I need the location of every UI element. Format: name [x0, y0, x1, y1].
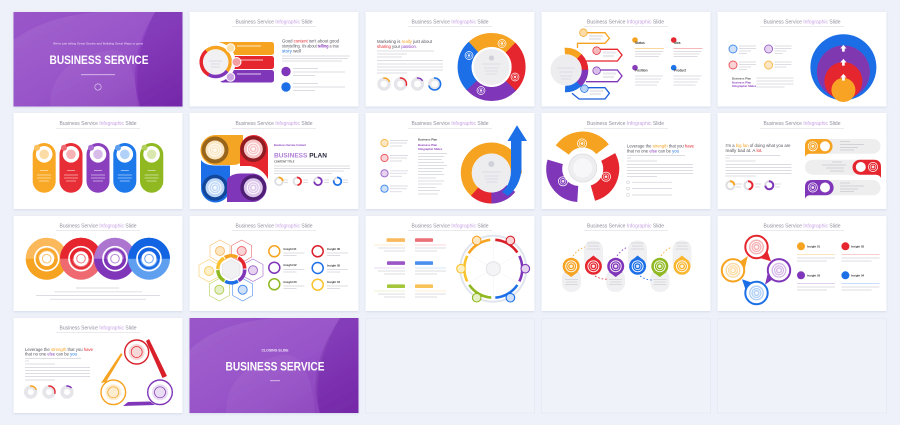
- slide title: Business Service Infographic Slide: [60, 224, 136, 230]
- left items: [381, 139, 388, 192]
- pin: red: [585, 256, 602, 275]
- orange strap: [101, 353, 122, 383]
- blue petal: [201, 160, 230, 202]
- grey capsules: [562, 240, 692, 292]
- arc: [539, 43, 593, 97]
- orange pin: [722, 256, 748, 281]
- orange petal: [201, 135, 243, 165]
- pin: yellow: [674, 256, 690, 275]
- node icons: [457, 236, 530, 302]
- plan text: [274, 143, 327, 164]
- plan text: CONTENT TITLE: [274, 160, 295, 164]
- purple circle: [94, 238, 136, 280]
- heading text: I'm a big fan of doing what you are: [726, 143, 791, 148]
- orange stripe: [218, 42, 274, 55]
- middle text: Business Plan: [418, 143, 437, 147]
- slide title: Business Service Infographic Slide: [412, 224, 488, 230]
- red pill: [60, 143, 82, 193]
- slide title: Business Service Infographic Slide: [587, 224, 664, 230]
- check list: [627, 181, 629, 196]
- slide title: Business Service Infographic Slide: [587, 121, 664, 127]
- slide 2: stacked stripes: [190, 12, 358, 106]
- cover tagline: We're just telling Great Stories and Building Great Ways to grow: [53, 42, 144, 46]
- item headers: Insight 01: [807, 244, 820, 248]
- item: Idea: [671, 37, 681, 45]
- blue pin: [742, 279, 768, 304]
- red strap: [146, 339, 167, 378]
- slide 11: four overlapping circles: [14, 216, 182, 311]
- plan text: BUSINESS PLAN: [274, 153, 327, 160]
- slide 16: triangle belts: [14, 318, 182, 413]
- slide 17: purple closing: [190, 317, 358, 413]
- middle text: Business Plan: [418, 138, 437, 142]
- slide 12: hexagon network: [190, 216, 358, 311]
- slide title: Business Service Infographic Slide: [764, 20, 840, 26]
- heading text: [627, 144, 694, 154]
- ring icons: [465, 40, 519, 94]
- item: Product: [671, 65, 687, 72]
- purple bullet: [281, 67, 291, 76]
- heading text: storytelling. It's about telling a true: [282, 44, 339, 48]
- slide 4: branching arms: [539, 12, 710, 106]
- nested circles: [810, 34, 876, 102]
- red tab: [805, 160, 881, 178]
- closing line: [270, 380, 280, 382]
- purple pin: [765, 259, 790, 285]
- purple petal: [227, 174, 267, 202]
- grey outer ring: [460, 236, 526, 302]
- heading text: [25, 347, 93, 357]
- left item circles: [729, 45, 773, 69]
- pin: green: [651, 258, 668, 277]
- orange wheel: [101, 380, 126, 405]
- bottom note: Business Plan: [732, 76, 751, 80]
- slide title: Business Service Infographic Slide: [412, 121, 488, 127]
- purple strap: [123, 402, 155, 406]
- pin: purple: [607, 258, 624, 277]
- heading text: sharing your passion.: [377, 44, 417, 49]
- insight list: Insight 06: [327, 247, 340, 251]
- blue pill: [113, 143, 136, 193]
- slide 7: four-part business plan: [190, 113, 358, 209]
- item: Idea: Idea: [674, 41, 681, 45]
- item: Position: [632, 65, 648, 72]
- item: Position: Position: [635, 68, 648, 72]
- item: Status: [632, 37, 645, 45]
- item: Product: Product: [674, 68, 687, 72]
- insight list: Insight 01: [284, 247, 297, 251]
- heading text: [377, 39, 433, 49]
- stripe icons: [226, 44, 241, 81]
- purple wheel: [148, 380, 172, 405]
- empty placeholder slides: [366, 318, 886, 413]
- slide title: Business Service Infographic Slide: [764, 224, 840, 230]
- colored arcs: [453, 228, 534, 309]
- heading text: Good content isn't about good: [282, 38, 339, 44]
- slide 5: nested circles: [718, 12, 886, 106]
- heading text: Marketing is really just about: [377, 39, 433, 44]
- closing label: CLOSING SLIDE: [262, 348, 288, 352]
- item headers: Insight 03: [807, 273, 820, 277]
- red arm: [586, 49, 622, 61]
- pin: orange: [563, 258, 580, 277]
- slide title: Business Service Infographic Slide: [764, 121, 840, 127]
- tags: [386, 238, 433, 288]
- slide title: Business Service Infographic Slide: [60, 326, 136, 332]
- red circle: [60, 238, 102, 280]
- slide 1: purple cover: [14, 11, 182, 106]
- item: Status: Status: [635, 41, 645, 45]
- blue arm: [572, 88, 609, 99]
- red wheel: [125, 340, 149, 364]
- central circle: [550, 54, 582, 86]
- heading text: really bad at. A lot.: [726, 148, 762, 153]
- slide 15: four pins loop: [718, 216, 886, 311]
- purple sector: [552, 142, 606, 196]
- item headers: [797, 242, 864, 279]
- white hub: [463, 239, 523, 299]
- slide title: Business Service Infographic Slide: [236, 224, 312, 230]
- small donuts: [377, 77, 441, 91]
- blue circle: [128, 238, 170, 280]
- slide title: Business Service Infographic Slide: [587, 20, 664, 26]
- slide title: Business Service Infographic Slide: [236, 20, 312, 26]
- up arrows: [840, 45, 847, 81]
- center disc: [569, 154, 597, 182]
- heading text: [726, 143, 791, 153]
- red petal: [240, 135, 268, 179]
- center color ring: [213, 251, 250, 288]
- mini donuts: [275, 177, 341, 185]
- orange circle: [26, 238, 68, 280]
- slide 10: speech tabs: [718, 113, 886, 209]
- cover title: BUSINESS SERVICE: [50, 53, 148, 67]
- heading text: Leverage the strength that you have: [627, 144, 694, 148]
- ring with center: [195, 42, 236, 82]
- slide 6: five pills: [14, 113, 182, 209]
- middle text: Infographic Slides: [418, 147, 443, 151]
- orange arm: [578, 33, 609, 48]
- slide 3: cycle ring: [366, 12, 534, 106]
- outer hexagons: [199, 240, 263, 301]
- slide title: Business Service Infographic Slide: [412, 20, 488, 26]
- slide 8: ring with rising arrow: [366, 113, 534, 209]
- heading text: Leverage the strength that you have: [25, 347, 93, 352]
- purple tab: [805, 180, 880, 199]
- purple pill: [86, 143, 110, 193]
- insight list: Insight 04: [327, 280, 340, 284]
- ring: [456, 138, 527, 208]
- heading text: that no one else can be you: [25, 352, 77, 357]
- slide 13: six part ring: [366, 216, 534, 311]
- dashed connectors: [573, 247, 672, 280]
- bottom note: [732, 76, 757, 88]
- heading text: story well: [282, 48, 301, 54]
- green pill: [140, 143, 163, 193]
- slide 14: six pins timeline: [542, 216, 710, 311]
- middle text: [418, 138, 443, 151]
- plan text: Business Service Content: [274, 143, 306, 147]
- insight list: [269, 246, 340, 290]
- purple stripe: [220, 70, 274, 82]
- hex icons: [204, 246, 258, 294]
- arm icons: [580, 29, 600, 92]
- insight list: Insight 02: [284, 263, 297, 267]
- slide title: Business Service Infographic Slide: [60, 121, 136, 127]
- heading text: [282, 38, 339, 54]
- donuts: [24, 385, 74, 399]
- red pin: [745, 236, 771, 261]
- slide 9: three sector wheel: [542, 113, 710, 209]
- blue rising arrow: [502, 125, 527, 196]
- sector icons: [558, 139, 611, 186]
- bottom note: Business Plan: [732, 80, 751, 84]
- bottom note: Infographic Slides: [732, 84, 757, 88]
- item headers: Insight 02: [851, 244, 864, 248]
- insight list: Insight 05: [327, 264, 340, 268]
- heading text: that no one else can be you: [627, 148, 679, 154]
- big ring: [453, 29, 530, 105]
- orange sector: [548, 129, 618, 200]
- red stripe: [228, 56, 274, 69]
- closing title: BUSINESS SERVICE: [226, 359, 324, 373]
- purple arm: [586, 70, 622, 82]
- orange pill: [33, 143, 56, 193]
- orange tab: [805, 139, 880, 157]
- insight list: Insight 03: [284, 280, 297, 284]
- cover circle icon: [95, 84, 101, 90]
- blue bullet: [281, 82, 291, 92]
- concentric marks: [35, 247, 161, 271]
- pin: blue: [629, 256, 646, 275]
- cover subtitle line: [81, 74, 115, 76]
- item headers: Insight 04: [851, 273, 864, 277]
- slide title: Business Service Infographic Slide: [236, 121, 312, 127]
- red sector: [553, 135, 620, 203]
- donuts: [726, 181, 773, 189]
